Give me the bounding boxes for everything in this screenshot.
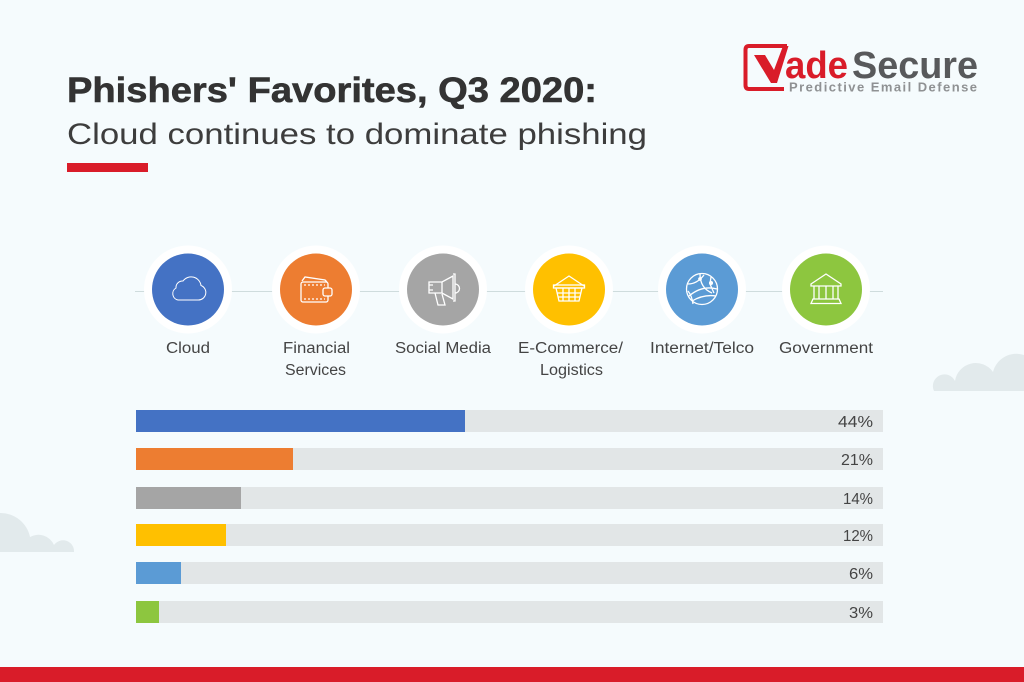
- logo tagline: Predictive Email Defense: [789, 80, 977, 94]
- bar: Government 3%: [136, 601, 883, 623]
- icon: globe network: [686, 274, 718, 304]
- icon: cloud: [173, 277, 206, 300]
- logo wordmark: ade: ade: [785, 45, 848, 87]
- category: financial services: [272, 246, 360, 379]
- icon: megaphone: [429, 274, 460, 305]
- label: Government: Government: [779, 340, 874, 357]
- bar: Government 3%: 3%: [849, 605, 873, 622]
- decorative cloud: right: [933, 354, 1024, 391]
- bar: E-Commerce/Logistics 12%: 12%: [843, 528, 873, 545]
- category: internet / telco: [650, 246, 754, 357]
- icon: wallet: [301, 277, 332, 302]
- logo checkmark: [754, 46, 788, 83]
- category: government: [779, 246, 874, 357]
- title accent bar: [67, 163, 148, 172]
- logo: Vade Secure: [746, 45, 978, 94]
- bar: E-Commerce/Logistics 12%: [136, 524, 883, 546]
- title: [67, 71, 647, 151]
- bar: Financial Services 21%: [136, 448, 883, 470]
- category: e-commerce / logistics: [518, 246, 624, 379]
- label: Financial Services: Financial: [283, 340, 350, 357]
- icon: basket: [554, 276, 584, 301]
- label: Internet/Telco: Internet/Telco: [650, 340, 754, 357]
- label: Financial Services: Services: [285, 362, 346, 379]
- title: Phishers' Favorites, Q3 2020:: [67, 71, 597, 110]
- bar: Social Media 14%: [136, 487, 883, 509]
- logo wordmark: Secure: Secure: [852, 45, 978, 87]
- bar: Internet/Telco 6%: 6%: [849, 566, 873, 583]
- logo box outline: [746, 46, 787, 89]
- bottom red band: [0, 667, 1024, 682]
- label: E-Commerce/ Logistics: E-Commerce/: [518, 340, 624, 357]
- bar: Social Media 14%: 14%: [843, 491, 873, 508]
- category: cloud: [144, 246, 232, 357]
- bar: Internet/Telco 6%: [136, 562, 883, 584]
- category: social media: [395, 246, 491, 357]
- label: Cloud: Cloud: [166, 340, 210, 357]
- icon: government building: [811, 274, 841, 304]
- bar: Cloud 44%: 44%: [838, 414, 873, 431]
- bar: Financial Services 21%: 21%: [841, 452, 873, 469]
- bar chart: [136, 410, 883, 623]
- connector line: [135, 290, 883, 292]
- bar: Cloud 44%: [136, 410, 883, 432]
- label: Social Media: Social Media: [395, 340, 491, 357]
- decorative cloud: left: [0, 513, 74, 552]
- subtitle: Cloud continues to dominate phishing: [67, 118, 647, 151]
- label: E-Commerce/ Logistics: Logistics: [540, 362, 603, 379]
